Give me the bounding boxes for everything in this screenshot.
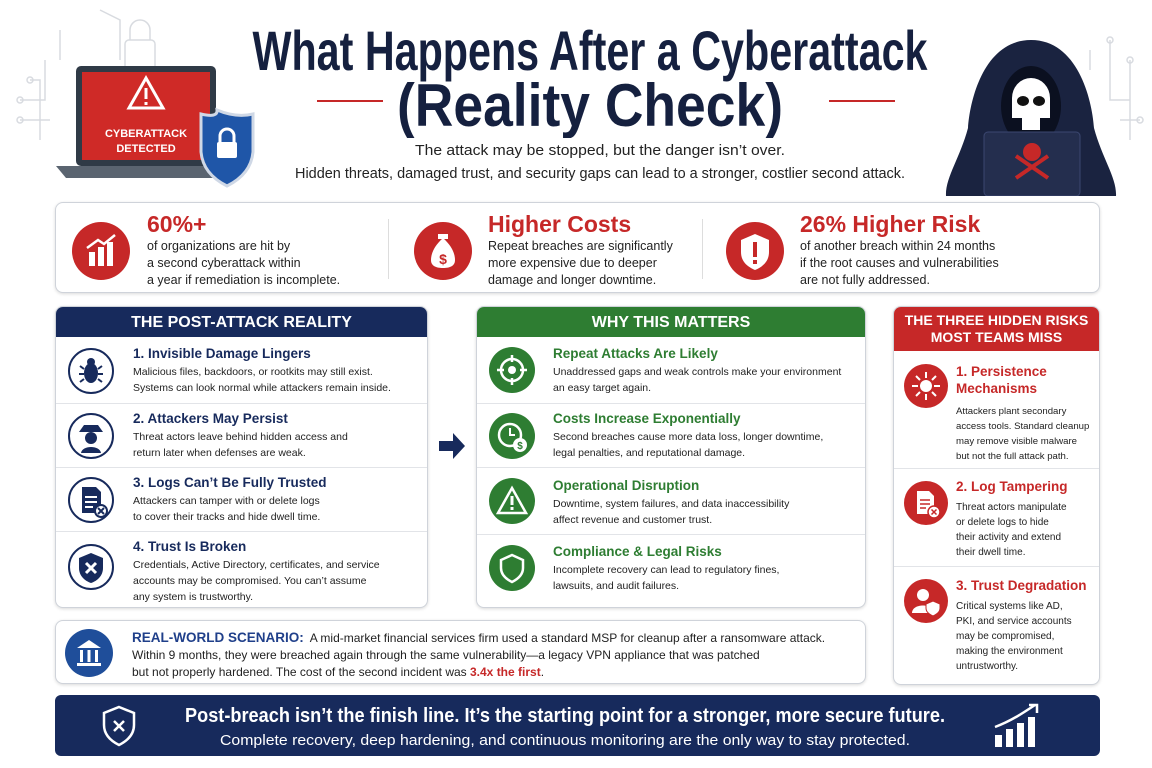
stat 1: 60%+ <box>147 211 206 237</box>
decorative background circuits left <box>16 10 1144 140</box>
risk 2 <box>894 469 1099 567</box>
banner text <box>185 705 945 749</box>
icon: growth chart <box>994 704 1038 747</box>
heading: WHY THIS MATTERS <box>592 314 750 331</box>
risk 1: but not the full attack path. <box>956 451 1069 462</box>
panel: why this matters <box>476 306 866 608</box>
risk 2: their dwell time. <box>956 547 1025 558</box>
risk 2: 2. Log Tampering <box>956 479 1068 494</box>
item 1 <box>56 337 427 404</box>
risk 2: Threat actors manipulate <box>956 502 1067 513</box>
risk 3: making the environment <box>956 646 1063 657</box>
item 3: 3. Logs Can’t Be Fully Trusted <box>133 475 327 490</box>
stat 3: of another breach within 24 months <box>800 239 995 253</box>
callout: real-world scenario: but not properly hardened. The cost of the second incident was 3.4x the first. <box>132 665 544 679</box>
item: operational disruption: Downtime, system failures, and data inaccessibility <box>553 498 789 510</box>
item 4: any system is trustworthy. <box>133 591 253 603</box>
stat 3: 26% Higher Risk <box>800 211 980 237</box>
stat 3: are not fully addressed. <box>800 273 930 287</box>
subtitle: Hidden threats, damaged trust, and security gaps can lead to a stronger, costlier second attack. <box>295 165 905 182</box>
icon: bar chart <box>72 222 130 280</box>
item 3: Attackers can tamper with or delete logs <box>133 495 320 507</box>
item 1: Systems can look normal while attackers remain inside. <box>133 382 391 394</box>
stat 1: a year if remediation is incomplete. <box>147 273 340 287</box>
item 2: Threat actors leave behind hidden access and <box>133 431 348 443</box>
risk 1: Mechanisms <box>956 381 1037 396</box>
subtitle <box>295 142 905 182</box>
stat 1 <box>72 211 340 287</box>
item 1: 1. Invisible Damage Lingers <box>133 346 311 361</box>
stat 3: if the root causes and vulnerabilities <box>800 256 999 270</box>
icon: laptop with cyberattack detected: CYBERATTACK <box>105 128 187 140</box>
banner text: Complete recovery, deep hardening, and continuous monitoring are the only way to stay protected. <box>220 732 910 749</box>
risk 1: access tools. Standard cleanup <box>956 421 1089 432</box>
heading: MOST TEAMS MISS <box>931 329 1062 345</box>
item: compliance: lawsuits, and audit failures. <box>553 580 679 592</box>
item 2: 2. Attackers May Persist <box>133 411 288 426</box>
title: (Reality Check) <box>397 72 783 138</box>
item 4 <box>68 539 380 603</box>
item 4: Credentials, Active Directory, certificates, and service <box>133 559 380 571</box>
title <box>252 19 928 138</box>
item: costs increase: Second breaches cause more data loss, longer downtime, <box>553 431 823 443</box>
item 3: to cover their tracks and hide dwell time. <box>133 511 320 523</box>
icon: money bag <box>414 222 472 280</box>
heading: THE THREE HIDDEN RISKS <box>905 312 1088 328</box>
risk 3: untrustworthy. <box>956 661 1018 672</box>
item: repeat attacks: an easy target again. <box>553 382 651 394</box>
stat 3 <box>726 211 999 287</box>
icon: money bag: $ <box>439 251 447 267</box>
callout: real-world scenario: REAL-WORLD SCENARIO: A mid-market financial services firm used a standard MSP for cleanup after a ransomware attack. <box>132 630 825 645</box>
item: repeat attacks: Repeat Attacks Are Likely <box>553 346 718 361</box>
risk 1: 1. Persistence <box>956 364 1047 379</box>
item 1: Malicious files, backdoors, or rootkits may still exist. <box>133 366 373 378</box>
icon: bank <box>65 629 113 677</box>
panel: three hidden risks <box>893 306 1100 685</box>
stat 2: Repeat breaches are significantly <box>488 239 673 253</box>
item 2: return later when defenses are weak. <box>133 447 306 459</box>
item: compliance: Incomplete recovery can lead to regulatory fines, <box>553 564 779 576</box>
callout: real-world scenario: Within 9 months, they were breached again through the same vulnerability—a legacy VPN appliance that was patched <box>132 648 760 662</box>
item 4: 4. Trust Is Broken <box>133 539 246 554</box>
risk 3 <box>904 578 1087 672</box>
arrow <box>439 433 465 459</box>
stats panel <box>55 202 1100 293</box>
item: repeat attacks: Unaddressed gaps and weak controls make your environment <box>553 366 841 378</box>
heading <box>477 307 865 337</box>
risk 3: Critical systems like AD, <box>956 601 1063 612</box>
item: costs increase <box>477 404 865 468</box>
stat 2 <box>414 211 673 287</box>
item: costs increase: Costs Increase Exponentially <box>553 411 741 426</box>
item 2 <box>56 404 427 468</box>
item: compliance: Compliance & Legal Risks <box>553 544 722 559</box>
icon: shield alert <box>726 222 784 280</box>
stat 2: damage and longer downtime. <box>488 273 656 287</box>
heading <box>894 307 1099 351</box>
stat 2: Higher Costs <box>488 211 631 237</box>
item 4: accounts may be compromised. You can’t assume <box>133 575 366 587</box>
risk 2: their activity and extend <box>956 532 1061 543</box>
icon: laptop with cyberattack detected <box>56 66 254 188</box>
heading <box>56 307 427 337</box>
item: costs increase: legal penalties, and reputational damage. <box>553 447 745 459</box>
stat 1: a second cyberattack within <box>147 256 301 270</box>
item: operational disruption: affect revenue and customer trust. <box>553 514 712 526</box>
stat 1: of organizations are hit by <box>147 239 290 253</box>
bottom banner <box>55 695 1100 756</box>
risk 1 <box>894 351 1099 469</box>
icon: shield x <box>102 706 136 746</box>
item: operational disruption: Operational Disruption <box>553 478 699 493</box>
item 3 <box>56 468 427 532</box>
item: operational disruption <box>477 468 865 535</box>
risk 2: or delete logs to hide <box>956 517 1049 528</box>
item: compliance <box>489 544 779 592</box>
item: costs increase: $ <box>517 441 523 452</box>
heading: THE POST-ATTACK REALITY <box>131 314 352 331</box>
icon: hooded hacker <box>946 40 1116 196</box>
risk 1: may remove visible malware <box>956 436 1077 447</box>
icon: laptop with cyberattack detected: DETECTED <box>116 143 176 155</box>
subtitle: The attack may be stopped, but the danger isn’t over. <box>415 142 785 159</box>
item: repeat attacks <box>477 337 865 404</box>
callout: real-world scenario <box>55 620 866 684</box>
stat 2: more expensive due to deeper <box>488 256 657 270</box>
risk 3: 3. Trust Degradation <box>956 578 1087 593</box>
risk 3: PKI, and service accounts <box>956 616 1072 627</box>
risk 1: Attackers plant secondary <box>956 406 1066 417</box>
risk 3: may be compromised, <box>956 631 1054 642</box>
panel: the post-attack reality <box>55 306 428 608</box>
